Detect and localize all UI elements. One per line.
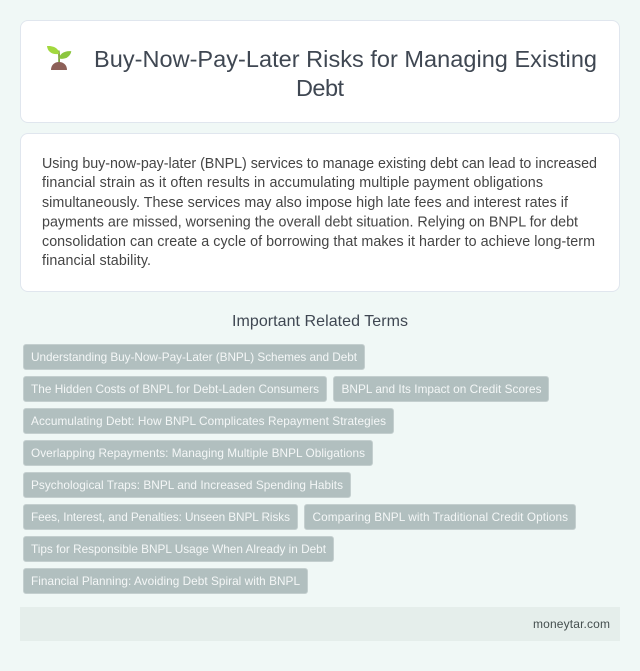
tag: Understanding Buy-Now-Pay-Later (BNPL) Schemes and Debt bbox=[31, 350, 358, 364]
tag bbox=[24, 440, 372, 466]
footer source text: moneytar.com bbox=[533, 617, 610, 631]
summary text: consolidation can create a cycle of borrowing that makes it harder to achieve long-term bbox=[42, 234, 595, 250]
tag: The Hidden Costs of BNPL for Debt-Laden Consumers bbox=[31, 382, 319, 396]
tag bbox=[24, 536, 334, 562]
summary text: simultaneously. These services may also impose high late fees and interest rates if bbox=[42, 195, 568, 211]
tag bbox=[24, 408, 394, 434]
tag bbox=[24, 472, 350, 498]
tag: Comparing BNPL with Traditional Credit Options bbox=[312, 510, 568, 524]
tag bbox=[24, 568, 308, 594]
tag bbox=[304, 504, 576, 530]
summary text: Using buy-now-pay-later (BNPL) services to manage existing debt can lead to increased bbox=[42, 156, 597, 172]
title text bbox=[94, 46, 597, 101]
tag: Overlapping Repayments: Managing Multiple BNPL Obligations bbox=[31, 446, 365, 460]
summary text: payments are missed, worsening the overall debt situation. Relying on BNPL for debt bbox=[42, 214, 578, 230]
summary text: financial strain as it often results in accumulating multiple payment obligations bbox=[42, 175, 543, 191]
tag: Accumulating Debt: How BNPL Complicates Repayment Strategies bbox=[31, 414, 386, 428]
tag: BNPL and Its Impact on Credit Scores bbox=[342, 382, 542, 396]
footer bar bbox=[20, 607, 620, 641]
title text: Buy-Now-Pay-Later Risks for Managing Existing bbox=[94, 46, 597, 72]
tag: Psychological Traps: BNPL and Increased Spending Habits bbox=[31, 478, 343, 492]
tag: Fees, Interest, and Penalties: Unseen BNPL Risks bbox=[31, 510, 290, 524]
summary text bbox=[42, 156, 597, 269]
tag: Tips for Responsible BNPL Usage When Already in Debt bbox=[31, 542, 327, 556]
tag bbox=[24, 376, 326, 402]
tag bbox=[24, 344, 364, 370]
title text: Debt bbox=[296, 75, 344, 101]
tag bbox=[24, 504, 298, 530]
related terms tags bbox=[23, 344, 576, 594]
title panel bbox=[20, 20, 620, 123]
related terms heading: Important Related Terms bbox=[232, 313, 408, 330]
icon: seedling bbox=[47, 46, 72, 70]
summary panel bbox=[20, 133, 620, 292]
summary text: financial stability. bbox=[42, 253, 151, 269]
tag: Financial Planning: Avoiding Debt Spiral with BNPL bbox=[31, 574, 300, 588]
tag bbox=[334, 376, 548, 402]
